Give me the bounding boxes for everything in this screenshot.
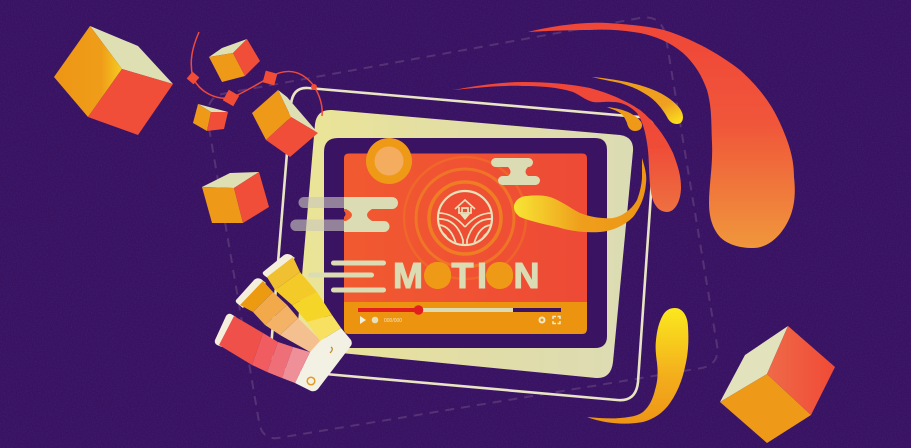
bottom yellow flame (587, 308, 688, 424)
play icon (360, 316, 366, 324)
fullscreen icon (553, 316, 560, 324)
cloud: upper right (491, 158, 540, 185)
cube: top left large (54, 26, 173, 135)
yellow tail flame over the screen (514, 158, 646, 232)
cube: tiny (193, 104, 228, 131)
player control bar (344, 302, 587, 334)
swatch: yellow (263, 254, 341, 341)
speed lines (308, 260, 386, 292)
cloud: left, crossing the screen edge (290, 197, 398, 232)
thin white outline frame (271, 88, 655, 400)
title: MOTION: N (514, 255, 540, 296)
dashed rotated frame (208, 17, 717, 438)
volume icon (372, 317, 378, 323)
title: MOTION: O (424, 255, 452, 296)
pen tool bezier path with nodes (187, 32, 322, 116)
cube: on frame corner (252, 90, 318, 157)
cube: small upper (209, 39, 260, 82)
title: MOTION (393, 255, 540, 296)
timecode: 000/000 (384, 318, 402, 324)
logo: farmhouse and fields (436, 191, 494, 248)
small yellow flame (592, 77, 683, 124)
orange sun circle (366, 138, 412, 184)
concentric rings (404, 157, 526, 279)
title: MOTION: O (486, 255, 514, 296)
swatch: orange (236, 278, 322, 352)
swatch base: white card with ring (295, 328, 352, 391)
tiny orange flame (607, 107, 642, 131)
title: MOTION: T (452, 255, 474, 296)
tablet body: cream panel (297, 110, 633, 378)
tablet screen: dark bezel (324, 138, 607, 348)
video area (290, 138, 587, 334)
swatch: red (215, 314, 310, 383)
title: MOTION: I (477, 255, 487, 296)
video frame background (344, 154, 587, 302)
cube: left middle (202, 172, 269, 223)
middle red flame (453, 82, 681, 212)
colour swatch fan (215, 254, 352, 391)
title: MOTION: M (393, 255, 423, 296)
big red flame (528, 23, 795, 248)
cube: bottom right large (720, 326, 835, 443)
progress track (358, 305, 561, 315)
settings icon (540, 318, 544, 322)
